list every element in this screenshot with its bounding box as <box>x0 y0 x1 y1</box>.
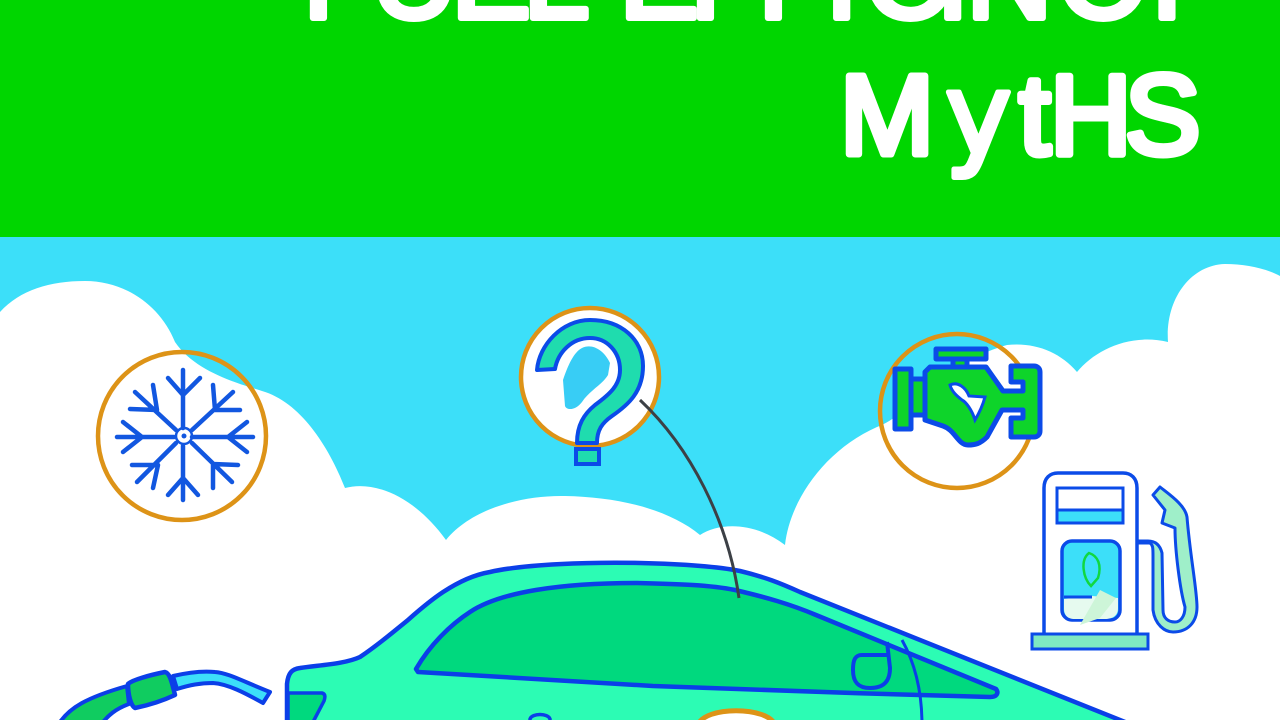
car window <box>416 583 997 697</box>
door line <box>902 640 922 720</box>
side mirror <box>853 642 890 688</box>
car body <box>287 563 1145 720</box>
leaf <box>1083 553 1100 586</box>
orange badge <box>698 711 775 720</box>
connector wire <box>640 400 739 598</box>
sky background <box>0 237 1280 720</box>
icon: snowflake in circle <box>98 352 266 520</box>
title: myths: MytHS <box>840 49 1200 181</box>
engine crack <box>950 384 985 420</box>
icon: question mark in circle <box>521 308 659 464</box>
clouds <box>0 264 1280 720</box>
fuel nozzle hose <box>60 672 270 720</box>
icon: fuel pump <box>1032 473 1197 649</box>
icon: engine in circle <box>880 334 1040 488</box>
head silhouette <box>563 346 610 409</box>
car <box>287 563 1145 720</box>
door handle <box>530 714 550 720</box>
headlight <box>288 693 325 720</box>
